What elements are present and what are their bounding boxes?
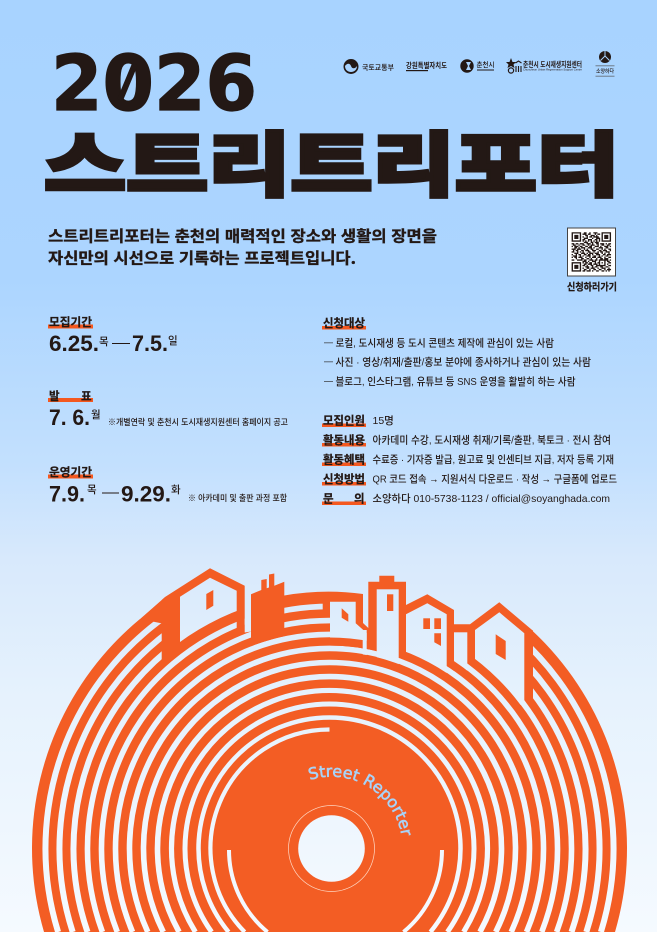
tagline: 자신만의 시선으로 기록하는 프로젝트입니다. [48,246,356,268]
logo: soyanghada [596,50,614,76]
eligibility list: 로컬, 도시재생 등 도시 콘텐츠 제작에 관심이 있는 사람 [336,336,554,350]
vinyl disc [32,551,627,932]
schedule: operating period: 운영기간 [49,464,92,480]
schedule: recruitment period: 7.5. [132,331,168,356]
row: headcount [322,412,394,428]
row: headcount: 모집인원 [323,412,365,428]
building blocks [236,604,475,671]
schedule: operating period: ※ 아카데미 및 출판 과정 포함 [188,492,287,504]
logo: ministry [344,59,394,74]
record with town skyline [32,568,627,932]
QR caption: 신청하러가기 [567,278,617,294]
logo: chuncheon: 춘천시 [476,60,494,70]
house windows [206,590,506,660]
row: contact [322,490,610,506]
row: headcount: 15명 [372,415,394,427]
row: how to apply: QR 코드 접속 → 지원서식 다운로드 · 작성 → 구글폼에 업로드 [372,472,617,486]
logo: gangwon: 강원특별자치도 [406,60,447,71]
logo: chuncheon [460,59,494,73]
eligibility list: 사진 · 영상/취재/출판/홍보 분야에 종사하거나 관심이 있는 사람 [336,356,591,368]
row: activities [322,432,611,448]
title year: 2026 [51,40,257,129]
row: contact: 문 [323,490,334,506]
thin ring around hole [288,806,374,892]
details table [322,412,617,506]
eligibility list: 블로그, 인스타그램, 유튜브 등 SNS 운영을 활발히 하는 사람 [336,375,576,388]
sky above skyline [0,500,657,632]
schedule: operating period: 목 [87,482,97,497]
QR code block [567,228,617,294]
main title: 스트리트리포터 [44,110,619,211]
schedule: recruitment period [48,314,178,356]
schedule: announcement: 월 [91,407,101,422]
record center hole [298,815,365,882]
slash through zero [120,64,135,100]
logo: ministry: 국토교통부 [362,62,394,73]
schedule: operating period: 화 [171,482,181,497]
house interiors [180,578,524,705]
schedule: announcement: 7. 6. [49,405,90,430]
row: how to apply [322,471,617,487]
row: benefits: 활동혜택 [323,452,365,468]
logo: urban regeneration center: 춘천시 도시재생지원센터 [523,59,582,70]
schedule: recruitment period: 모집기간 [49,314,92,330]
QR modules [572,233,611,271]
schedule: announcement: ※개별연락 및 춘천시 도시재생지원센터 홈페이지 공고 [108,416,288,428]
logo: urban regeneration center [506,58,582,73]
row: benefits: 수료증 · 기자증 발급, 원고료 및 인센티브 지급, 저자 등록 기재 [372,453,614,466]
row: activities: 아카데미 수강, 도시재생 취재/기록/출판, 북토크 · 전시 참여 [372,434,611,446]
eligibility list [322,315,591,388]
schedule: announcement: 발 [49,388,60,404]
schedule: operating period [48,464,287,506]
logo: soyanghada: 소양하다 [596,67,614,75]
curved label: Street Reporter: Street Reporter [308,766,411,836]
row: contact: 의 [354,490,365,506]
row: how to apply: 신청방법 [323,471,365,487]
orange base behind skyline [162,560,533,705]
tagline [48,224,437,268]
schedule: operating period: 7.9. [49,482,85,506]
schedule: recruitment period: 목 [99,334,109,349]
schedule: announcement [48,388,288,430]
QR frame [568,228,616,276]
row: contact: 소양하다 010-5738-1123 / official@soyanghada.com [372,492,610,505]
tagline: 스트리트리포터는 춘천의 매력적인 장소와 생활의 장면을 [48,224,437,246]
row: activities: 활동내용 [323,432,365,448]
schedule: recruitment period: 6.25. [49,331,99,356]
partner logos [344,50,614,76]
record grooves [87,606,571,932]
schedule: announcement: 표 [81,388,92,404]
eligibility list: 신청대상 [323,315,365,331]
schedule: recruitment period: 일 [168,333,178,348]
logo: urban regeneration center: Chuncheon Urban Regeneration Support Center [523,68,582,72]
row: benefits [322,452,614,468]
schedule: operating period: 9.29. [121,482,171,506]
